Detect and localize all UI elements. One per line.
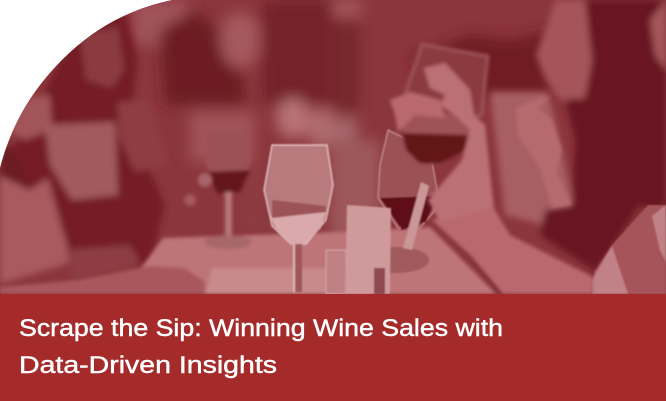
- left woman: [0, 10, 168, 284]
- blurred restaurant background: [133, 0, 552, 240]
- menu card and napkin: [326, 205, 391, 294]
- cardigan sleeve: [592, 205, 666, 294]
- background photo with red duotone: [0, 0, 666, 294]
- right woman hand at chin: [516, 96, 572, 208]
- table: [0, 227, 515, 294]
- right red wine glass: [376, 128, 438, 274]
- right woman hair and dark top: [490, 0, 666, 272]
- foreground clear wine glass: [264, 145, 333, 292]
- title line 2: Data-Driven Insights: [19, 352, 277, 379]
- raised hand, wine glass and arm: [390, 44, 593, 294]
- title line 1: Scrape the Sip: Winning Wine Sales with: [19, 315, 503, 342]
- title panel: [0, 294, 666, 401]
- background wine glass: [183, 158, 251, 237]
